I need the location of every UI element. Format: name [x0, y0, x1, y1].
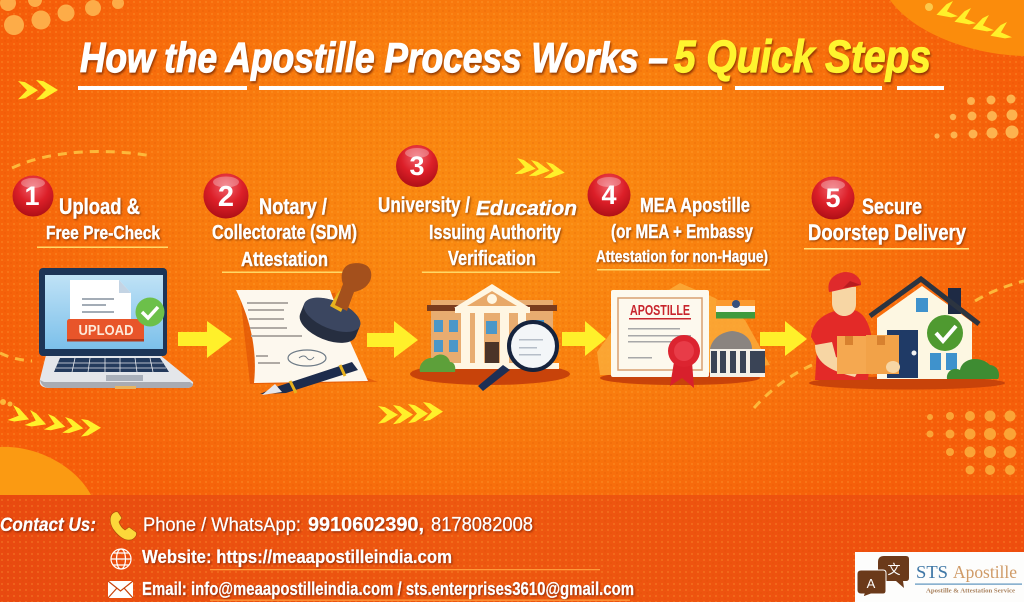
badge 3 — [396, 145, 438, 187]
step 1 heading: Upload & — [59, 194, 140, 219]
step 5 heading: Secure — [862, 194, 922, 219]
icon: globe — [111, 549, 131, 569]
badge 1 — [12, 176, 54, 216]
title: 5 Quick Steps — [674, 31, 931, 82]
step 1 heading: Free Pre-Check — [46, 223, 161, 243]
logo: STS Apostille: Apostille & Attestation Service — [926, 588, 1015, 594]
step 2 heading: Attestation — [241, 249, 328, 271]
badge 5: 5 — [825, 183, 841, 213]
contact: phone: 9910602390, — [308, 514, 424, 536]
logo: STS Apostille: STS — [916, 562, 948, 582]
contact: email: Email: info@meaapostilleindia.com / sts.enterprises3610@gmail.com — [142, 579, 634, 599]
step 5 heading: Doorstep Delivery — [808, 220, 967, 245]
step 5 — [804, 176, 1005, 390]
logo: STS Apostille — [855, 552, 1024, 602]
step 4 heading: Attestation for non-Hague) — [596, 247, 768, 266]
icon: translation bubbles — [857, 556, 909, 597]
icon: apostille certificate, flag and embassy: APOSTILLE — [630, 302, 690, 319]
step 3 heading: Verification — [448, 248, 536, 270]
contact: label: Contact Us: — [0, 515, 96, 536]
badge 4: 4 — [601, 180, 617, 210]
title: How the Apostille Process Works – — [80, 34, 668, 81]
logo: STS Apostille: Apostille — [953, 562, 1017, 582]
contact: phone: Phone / WhatsApp: — [143, 515, 301, 536]
step 4 — [588, 174, 770, 388]
badge 5 — [812, 176, 854, 220]
step 2 heading: Collectorate (SDM) — [212, 222, 357, 244]
contact: phone — [110, 512, 533, 540]
step 5 heading — [804, 194, 969, 250]
icon: courier delivering to house — [809, 272, 1005, 390]
badge 4 — [588, 174, 630, 216]
icon: notary stamp, paper and pen — [236, 263, 378, 395]
icon: phone — [110, 512, 137, 540]
step 4 heading: MEA Apostille — [640, 194, 750, 217]
step 3 heading: Education — [476, 198, 577, 220]
contact: phone: 8178082008 — [431, 514, 533, 536]
badge 1: 1 — [24, 181, 40, 211]
step 1 — [12, 176, 193, 389]
icon: translation bubbles: 文 — [887, 562, 901, 577]
arrow 3 — [562, 321, 606, 356]
step 2 heading: Notary / — [259, 194, 327, 219]
icon: laptop upload — [39, 268, 193, 389]
step 3 heading — [378, 194, 577, 273]
title — [78, 31, 944, 90]
arrow 4 — [760, 321, 807, 356]
badge 2: 2 — [218, 181, 234, 213]
step 3 heading: University / — [378, 194, 470, 217]
arrow 2 — [367, 321, 418, 358]
arrow 1 — [178, 321, 232, 358]
icon: university building with magnifier — [410, 284, 570, 391]
contact: website: Website: https://meaapostilleindia.com — [142, 546, 452, 567]
step 1 heading — [37, 194, 168, 248]
step 2 — [204, 174, 378, 395]
icon: laptop upload: UPLOAD — [78, 322, 134, 339]
icon: envelope — [108, 581, 133, 598]
badge 2 — [204, 174, 248, 218]
footer band — [0, 495, 1024, 602]
step 2 heading — [212, 194, 357, 273]
icon: translation bubbles: A — [867, 576, 876, 591]
icon: apostille certificate, flag and embassy — [597, 283, 770, 388]
badge 3: 3 — [409, 151, 425, 181]
step 4 heading — [596, 194, 770, 270]
step 3 heading: Issuing Authority — [429, 222, 562, 244]
step 3 — [378, 145, 577, 391]
step 4 heading: (or MEA + Embassy — [611, 221, 753, 243]
contact: website — [111, 546, 600, 570]
